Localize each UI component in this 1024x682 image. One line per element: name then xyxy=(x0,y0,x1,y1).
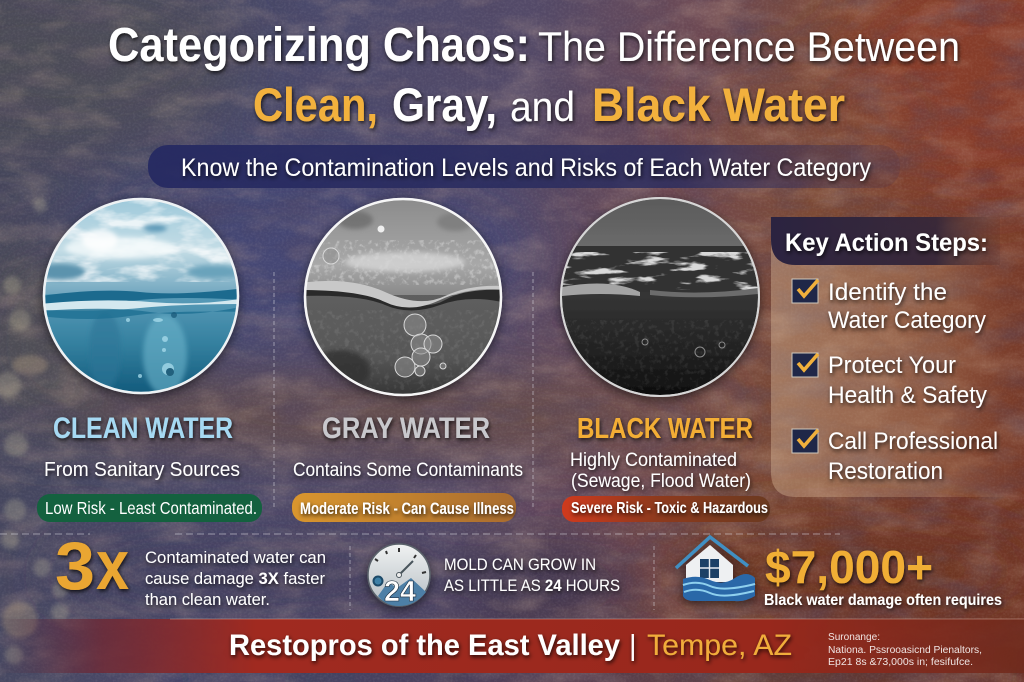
title: Gray, xyxy=(392,78,497,131)
source note xyxy=(828,632,982,668)
stat text: cost: Black water damage often requires xyxy=(764,592,1002,609)
description: clean water: From Sanitary Sources xyxy=(44,459,240,481)
subtitle banner: Know the Contamination Levels and Risks of Each Water Category xyxy=(181,154,871,182)
panel: clean water xyxy=(35,195,262,522)
stat text: damage: cause damage 3X faster xyxy=(145,569,325,588)
step 1: Identify the xyxy=(828,279,947,306)
stat: 3x faster xyxy=(55,526,326,609)
heading: black water: BLACK WATER xyxy=(577,413,753,445)
risk badge: low risk: Low Risk - Least Contaminated. xyxy=(45,498,257,518)
source note: Suronange: xyxy=(828,632,880,643)
icon: clock: 24 xyxy=(384,576,416,608)
risk badge: moderate risk: Moderate Risk - Can Cause Illness xyxy=(300,499,514,518)
title: The Difference Between xyxy=(538,23,960,70)
company name and location: Restopros of the East Valley xyxy=(229,629,620,662)
stat: mold in 24 hours xyxy=(368,544,620,608)
step 2: Protect Your xyxy=(828,352,956,379)
stat text: damage: than clean water. xyxy=(145,590,270,609)
stat text: damage: Contaminated water can xyxy=(145,548,326,567)
stat text: mold: AS LITTLE AS 24 HOURS xyxy=(444,577,620,595)
step 3: Restoration xyxy=(828,458,943,485)
heading: key action steps xyxy=(771,217,1000,265)
big number 3x: 3 xyxy=(55,528,95,604)
step 3: Call Professional xyxy=(828,428,998,455)
company name and location: | xyxy=(629,630,637,662)
icon: checkbox xyxy=(792,429,818,453)
step 3 xyxy=(792,428,998,485)
photo: black water circle xyxy=(560,197,760,397)
description: black water: (Sewage, Flood Water) xyxy=(571,471,751,492)
footer banner xyxy=(0,619,1024,673)
big number 3x xyxy=(55,526,129,604)
title: and xyxy=(510,83,575,130)
stat: $7,000+ damage: $7,000+ xyxy=(765,541,933,593)
stat: $7,000+ damage xyxy=(676,537,1002,609)
title: Categorizing Chaos: xyxy=(108,19,530,72)
source note: Ep21 8s &73,000s in; fesifufce. xyxy=(828,657,973,668)
column dividers xyxy=(0,272,840,610)
heading: clean water: CLEAN WATER xyxy=(53,412,233,445)
icon: checkbox xyxy=(792,279,818,303)
icon: clock xyxy=(368,544,430,608)
risk badge: moderate risk xyxy=(292,493,516,522)
company name and location: Tempe, AZ xyxy=(647,629,792,662)
risk badge: severe risk: Severe Risk - Toxic & Hazardous xyxy=(571,500,768,517)
title: Clean, xyxy=(253,78,378,131)
heading: gray water: GRAY WATER xyxy=(322,412,490,445)
panel: key action steps xyxy=(771,217,1024,497)
step 1 xyxy=(792,279,986,334)
big number 3x: x xyxy=(96,526,129,604)
stat text: damage xyxy=(145,548,326,609)
source note: Nationa. Pssrooasicnd Pienaltors, xyxy=(828,645,982,656)
panel: gray water xyxy=(292,195,523,522)
title: Black Water xyxy=(592,78,845,131)
risk badge: low risk xyxy=(37,494,262,522)
risk badge: severe risk xyxy=(562,496,770,522)
subtitle banner xyxy=(148,145,900,188)
description: black water: Highly Contaminated xyxy=(570,450,737,471)
title xyxy=(108,19,960,131)
step 2 xyxy=(792,352,987,409)
icon: flooded house xyxy=(676,537,755,601)
panel: black water xyxy=(560,197,770,522)
stat text: mold: MOLD CAN GROW IN xyxy=(444,556,596,574)
stat text: mold xyxy=(444,556,620,595)
photo: clean water circle xyxy=(35,195,245,395)
step 1: Water Category xyxy=(828,307,986,334)
photo: gray water circle xyxy=(300,195,506,396)
step 2: Health & Safety xyxy=(828,382,987,409)
heading: key action steps: Key Action Steps: xyxy=(785,229,988,257)
description: gray water: Contains Some Contaminants xyxy=(293,460,523,481)
description: black water xyxy=(570,450,751,492)
bokeh lights xyxy=(0,198,69,664)
icon: checkbox xyxy=(792,353,818,377)
